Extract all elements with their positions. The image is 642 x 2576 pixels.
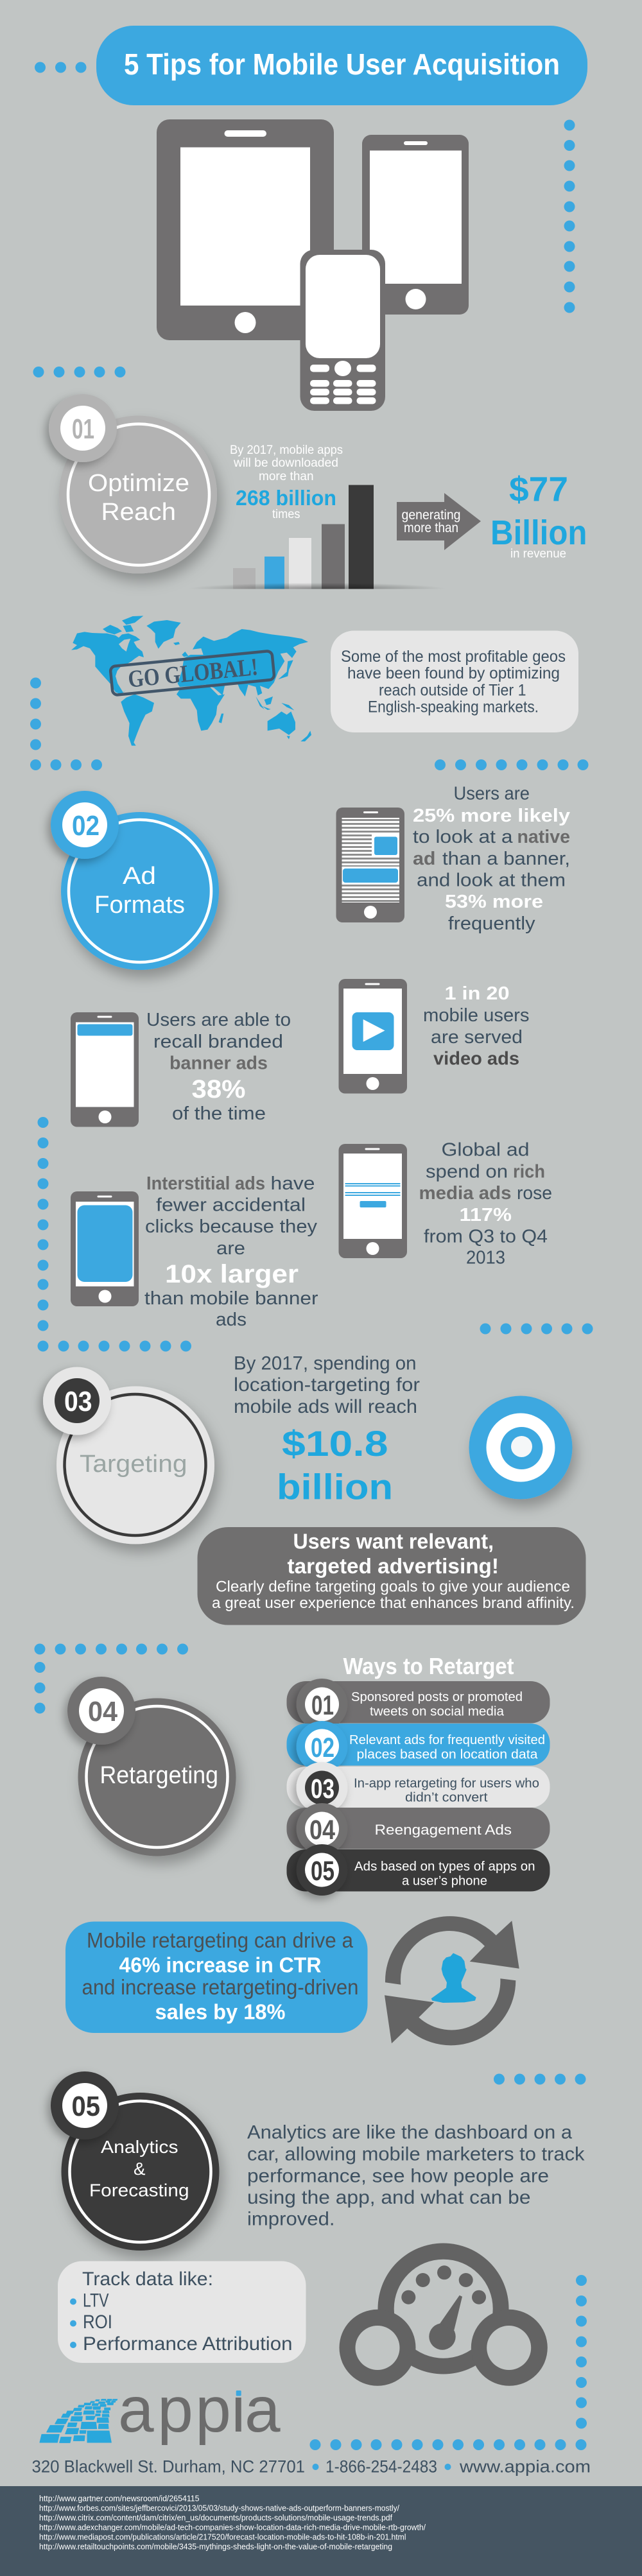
text: rich media stat xyxy=(419,1140,552,1268)
text: native ad stat: frequently xyxy=(448,913,535,934)
text: analytics description: car, allowing mobile marketers to track xyxy=(247,2144,586,2165)
footer: sources: http://www.mediapost.com/publications/article/217520/forecast-location-mobile-ads-to-hit-108b-in-201.html xyxy=(39,2533,406,2542)
stat: 268 billion downloads xyxy=(230,444,343,521)
text: rich media stat: Global ad xyxy=(442,1140,529,1161)
text: rich media stat: spend on xyxy=(426,1162,508,1182)
callout: profitable geos: reach outside of Tier 1 xyxy=(379,682,526,700)
heading: Ways to Retarget: Ways to Retarget xyxy=(343,1653,514,1679)
text: analytics description: improved. xyxy=(247,2208,335,2230)
section 03 circle: Targeting: 03 xyxy=(64,1386,92,1417)
text: interstitial ads stat: ads xyxy=(216,1310,247,1330)
title banner: 5 Tips for Mobile User Acquisition xyxy=(124,48,560,81)
text: banner ads stat: banner ads xyxy=(169,1053,268,1073)
contact line xyxy=(32,2457,591,2477)
footer: sources: http://www.adexchanger.com/mobile/ad-tech-companies-show-location-data-rich-media-drive-mobile-rtb-growth/ xyxy=(39,2523,426,2532)
section 05 circle: Analytics & Forecasting: Analytics xyxy=(101,2137,178,2157)
text: interstitial ads stat: have xyxy=(271,1173,315,1194)
section 05 circle: Analytics & Forecasting: 05 xyxy=(72,2091,100,2122)
icon: dashboard gauge xyxy=(339,2243,548,2386)
section 02 circle: Ad Formats xyxy=(51,791,219,970)
list item 3: 03 xyxy=(311,1774,334,1804)
stat: $77 billion in revenue: in revenue xyxy=(510,547,566,561)
text: interstitial ads stat: are xyxy=(216,1238,245,1259)
text: video ads stat: are served xyxy=(431,1027,523,1048)
text: video ads stat: video ads xyxy=(433,1049,519,1069)
callout: profitable geos: Some of the most profitable geos xyxy=(341,648,566,666)
stat: $77 billion in revenue: Billion xyxy=(490,514,587,552)
section 02 circle: Ad Formats: 02 xyxy=(72,810,100,842)
list item 5: 05 xyxy=(311,1856,334,1887)
section 04 circle: Retargeting: 04 xyxy=(88,1696,117,1727)
stat: 268 billion downloads: 268 billion xyxy=(236,486,336,510)
callout: profitable geos: English-speaking markets. xyxy=(368,698,539,716)
callout: users want relevant advertising xyxy=(198,1527,586,1625)
contact line: 320 Blackwell St. Durham, NC 27701 xyxy=(32,2457,305,2477)
icon: refresh arrows with user xyxy=(385,1916,519,2045)
logo: appia: appia xyxy=(118,2374,281,2446)
list item 5: a user’s phone xyxy=(402,1874,487,1889)
icon: target xyxy=(469,1396,573,1500)
stat: $10.8 billion location targeting: By 2017, spending on xyxy=(234,1353,416,1374)
text: banner ads stat xyxy=(146,1010,291,1124)
text: interstitial ads stat: fewer accidental xyxy=(156,1195,306,1216)
callout: users want relevant advertising: Clearly define targeting goals to give your audience xyxy=(216,1578,570,1596)
text: rich media stat: from Q3 to Q4 xyxy=(424,1226,548,1247)
callout: users want relevant advertising: targeted advertising! xyxy=(288,1554,499,1578)
panel: track data list xyxy=(58,2261,306,2363)
text: interstitial ads stat xyxy=(144,1173,318,1330)
contact line: 1-866-254-2483 xyxy=(325,2457,437,2477)
text: banner ads stat: Users are able to xyxy=(146,1010,291,1030)
footer: sources xyxy=(0,2486,642,2576)
text: native ad stat: Users are xyxy=(453,783,530,804)
text: interstitial ads stat: clicks because they xyxy=(145,1216,318,1237)
contact line: www.appia.com xyxy=(459,2457,591,2477)
icon: phone with video ad xyxy=(339,979,407,1094)
section 05 circle: Analytics & Forecasting: Forecasting xyxy=(89,2180,189,2200)
icon: phone with native ad xyxy=(336,808,404,922)
list item 2: Relevant ads for frequently visited xyxy=(349,1733,545,1747)
footer: sources: http://www.citrix.com/content/dam/citrix/en_us/documents/products-solutions/mobile-usage-trends.pdf xyxy=(39,2514,393,2523)
callout: mobile retargeting stats: 46% increase in CTR xyxy=(119,1953,322,1977)
title banner xyxy=(96,26,587,105)
text: banner ads stat: recall branded xyxy=(153,1032,283,1052)
text: interstitial ads stat: Interstitial ads xyxy=(146,1173,265,1194)
text: video ads stat: mobile users xyxy=(423,1005,529,1026)
text: native ad stat: 25% more likely xyxy=(413,806,570,826)
text: rich media stat: media ads xyxy=(419,1183,511,1204)
text: interstitial ads stat: 10x larger xyxy=(165,1260,299,1288)
text: rich media stat: rich xyxy=(513,1162,545,1182)
arrow: generating more than xyxy=(397,493,481,550)
stat: $77 billion in revenue xyxy=(490,470,587,561)
text: native ad stat: and look at them xyxy=(417,870,566,891)
text: analytics description: using the app, and what can be xyxy=(247,2187,530,2208)
list item 3: In-app retargeting for users who xyxy=(354,1777,539,1791)
list item 2: 02 xyxy=(311,1733,334,1763)
stamp: GO GLOBAL!: GO GLOBAL! xyxy=(127,653,259,693)
panel: track data list: Track data like: xyxy=(82,2269,213,2290)
text: video ads stat xyxy=(423,983,529,1069)
text: rich media stat: rose xyxy=(517,1183,552,1204)
section 04 circle: Retargeting: Retargeting xyxy=(100,1762,218,1789)
list item 4 xyxy=(286,1803,550,1854)
text: video ads stat: 1 in 20 xyxy=(444,983,510,1004)
text: analytics description: performance, see how people are xyxy=(247,2166,549,2186)
panel: track data list: Performance Attribution xyxy=(83,2333,293,2355)
list item 4: 04 xyxy=(309,1815,335,1846)
callout: mobile retargeting stats: and increase retargeting-driven xyxy=(82,1975,358,1999)
stat: $10.8 billion location targeting xyxy=(234,1353,420,1507)
footer: sources: http://www.gartner.com/newsroom/id/2654115 xyxy=(39,2494,200,2503)
callout: mobile retargeting stats xyxy=(65,1922,367,2033)
callout: users want relevant advertising: a great user experience that enhances brand affinity. xyxy=(212,1595,575,1612)
text: native ad stat xyxy=(413,783,570,934)
section 02 circle: Ad Formats: Formats xyxy=(94,892,185,919)
callout: mobile retargeting stats: sales by 18% xyxy=(155,2000,285,2023)
arrow: generating more than: more than xyxy=(404,521,458,535)
section 01 circle: Optimize Reach: 01 xyxy=(72,413,94,445)
section 05 circle: Analytics & Forecasting: & xyxy=(134,2159,146,2179)
text: analytics description: Analytics are like the dashboard on a xyxy=(247,2122,572,2143)
stat: $10.8 billion location targeting: mobile ads will reach xyxy=(234,1396,417,1417)
text: native ad stat: 53% more xyxy=(445,892,543,912)
list item 2 xyxy=(286,1721,550,1772)
text: native ad stat: ad xyxy=(413,849,435,869)
stat: $10.8 billion location targeting: $10.8 xyxy=(282,1423,388,1464)
icon: phone with banner ad xyxy=(71,1012,139,1127)
list item 1: Sponsored posts or promoted xyxy=(351,1690,523,1704)
callout: profitable geos xyxy=(331,630,578,732)
icon: devices (tablet, smartphone, feature phone) xyxy=(157,119,469,411)
panel: track data list: ROI xyxy=(83,2312,112,2333)
footer: sources: http://www.forbes.com/sites/jeffbercovici/2013/05/03/study-shows-native-ads-outperform-banners-mostly/ xyxy=(39,2503,400,2512)
world map xyxy=(71,616,311,746)
list item 3 xyxy=(286,1762,550,1813)
panel: track data list: LTV xyxy=(83,2290,109,2311)
stat: 268 billion downloads: more than xyxy=(259,470,313,483)
list item 5 xyxy=(286,1844,550,1896)
stat: $10.8 billion location targeting: billion xyxy=(277,1466,393,1507)
text: analytics description xyxy=(247,2122,586,2230)
text: rich media stat: 117% xyxy=(460,1205,512,1225)
stat: 268 billion downloads: will be downloaded xyxy=(233,456,338,470)
list: ways to retarget xyxy=(286,1679,550,1896)
text: banner ads stat: 38% xyxy=(191,1075,245,1103)
bar chart xyxy=(188,485,446,589)
section 04 circle: Retargeting xyxy=(67,1677,236,1856)
section 01 circle: Optimize Reach: Optimize xyxy=(88,470,189,497)
section 02 circle: Ad Formats: Ad xyxy=(123,863,156,890)
list item 5: Ads based on types of apps on xyxy=(354,1860,535,1874)
list item 3: didn’t convert xyxy=(405,1791,488,1805)
stat: 268 billion downloads: times xyxy=(272,508,300,521)
list item 2: places based on location data xyxy=(357,1747,538,1761)
callout: profitable geos: have been found by optimizing xyxy=(347,664,560,682)
icon: phone with rich media ad xyxy=(339,1144,407,1258)
section 05 circle: Analytics & Forecasting xyxy=(51,2071,220,2251)
section 01 circle: Optimize Reach xyxy=(49,394,217,574)
footer: sources: http://www.retailtouchpoints.com/mobile/3435-mythings-sheds-light-on-the-value-of-mobile-retargeting xyxy=(39,2542,392,2551)
section 03 circle: Targeting xyxy=(43,1367,214,1544)
icon: phone with interstitial ad xyxy=(71,1191,139,1306)
list item 1 xyxy=(286,1679,550,1730)
text: banner ads stat: of the time xyxy=(172,1103,266,1124)
list item 1: tweets on social media xyxy=(370,1705,505,1719)
logo: appia xyxy=(40,2374,281,2446)
callout: users want relevant advertising: Users want relevant, xyxy=(293,1529,494,1553)
text: interstitial ads stat: than mobile banner xyxy=(144,1288,318,1309)
stat: $77 billion in revenue: $77 xyxy=(509,470,568,508)
stat: $10.8 billion location targeting: location-targeting for xyxy=(234,1374,420,1396)
text: native ad stat: than a banner, xyxy=(442,849,570,869)
section 01 circle: Optimize Reach: Reach xyxy=(101,499,176,526)
section 03 circle: Targeting: Targeting xyxy=(80,1451,187,1478)
callout: mobile retargeting stats: Mobile retargeting can drive a xyxy=(87,1928,354,1952)
text: native ad stat: to look at a xyxy=(413,827,513,847)
list item 4: Reengagement Ads xyxy=(375,1822,512,1838)
arrow: generating more than: generating xyxy=(402,508,461,523)
text: native ad stat: native xyxy=(517,827,570,847)
list item 1: 01 xyxy=(311,1690,334,1721)
text: rich media stat: 2013 xyxy=(466,1248,505,1268)
stat: 268 billion downloads: By 2017, mobile apps xyxy=(230,444,343,457)
